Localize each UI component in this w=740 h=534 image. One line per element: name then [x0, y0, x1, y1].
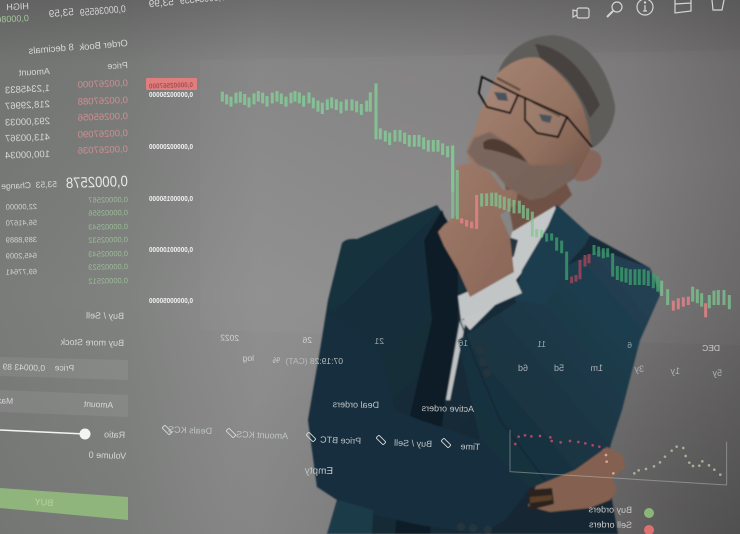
time axis labels: 07:19:28 (CAT) — [285, 356, 343, 366]
orders table — [162, 399, 480, 477]
time axis labels: 11 — [537, 339, 546, 349]
time axis labels: DEC — [702, 343, 720, 353]
time axis labels: 16 — [458, 338, 468, 348]
watch — [528, 488, 554, 510]
order book panel: 0,00036559 — [79, 4, 126, 19]
orders table: Buy / Sell — [394, 438, 432, 449]
tie — [504, 236, 518, 262]
icon: camera — [573, 8, 589, 18]
ratio slider — [0, 428, 90, 440]
order book panel: 1,2345833 — [5, 83, 50, 96]
neck — [505, 170, 572, 240]
candlestick chart — [222, 83, 729, 317]
icon: info — [637, 0, 653, 15]
price tag: 0,00002567000 — [149, 82, 193, 91]
order book panel: 8 decimals — [28, 42, 74, 57]
time axis labels: 1y — [670, 366, 680, 376]
orders table: Price BTC — [319, 435, 361, 446]
order book panel: 0,00002512 — [88, 276, 128, 286]
red bars — [462, 195, 706, 317]
order book panel: 389,8889 — [6, 235, 37, 245]
order book panel: Change — [1, 180, 31, 191]
y-axis labels: 0,00000250000 — [149, 92, 193, 99]
order book panel: Amount — [18, 66, 50, 78]
y-axis labels: 0,00000200000 — [149, 144, 193, 151]
time axis labels: 26 — [302, 335, 312, 345]
order book panel: Price — [107, 60, 128, 71]
time axis labels: 1m — [590, 363, 603, 373]
hair shadow — [535, 44, 600, 118]
time axis labels: 21 — [374, 336, 384, 346]
order book panel: 100,00034 — [5, 149, 50, 162]
hair — [498, 35, 615, 148]
buy and sell form: Buy / Sell — [86, 310, 124, 321]
buy and sell form: Volume 0 — [88, 450, 126, 461]
legend — [588, 504, 654, 534]
icon: magnifier — [607, 2, 622, 17]
face — [467, 57, 592, 200]
jacket body — [308, 205, 660, 534]
order book panel: 293,00033 — [5, 116, 50, 129]
icon: cup — [712, 0, 724, 10]
time axis labels: 5d — [554, 363, 564, 373]
person — [308, 35, 660, 534]
icon: calendar — [675, 0, 691, 13]
buy and sell form — [0, 310, 128, 520]
orders table: Deal orders — [332, 399, 379, 410]
price field — [0, 357, 128, 380]
left forearm — [308, 310, 530, 534]
glasses — [479, 77, 592, 147]
orders table: Active orders — [421, 403, 474, 414]
order book panel: 0,00002543 — [88, 249, 128, 259]
time axis labels — [220, 332, 722, 378]
order book panel: HIGH — [6, 1, 29, 12]
order book panel: 0,00002567 — [88, 195, 128, 205]
order book panel: 413,00367 — [5, 132, 50, 145]
beard — [467, 132, 575, 200]
time axis labels: log — [242, 353, 254, 363]
shirt — [463, 206, 560, 330]
order book panel: 56,41670 — [6, 218, 37, 228]
buy button — [0, 488, 128, 520]
depth chart — [510, 430, 727, 485]
buy and sell form: Ratio — [104, 429, 125, 440]
icons: pencils — [162, 425, 451, 448]
y-axis labels: 0,00000150000 — [149, 196, 193, 203]
arm fold — [460, 320, 545, 480]
orders table: Time — [460, 441, 480, 452]
lower hand — [528, 447, 625, 512]
legend: Sell orders — [588, 519, 632, 530]
moustache — [483, 139, 527, 162]
y-axis labels — [146, 78, 197, 305]
green bars, right section — [453, 146, 729, 309]
order book panel: 69,77641 — [6, 267, 37, 277]
top toolbar icons — [573, 0, 724, 18]
y-axis labels: 0,00000100000 — [149, 247, 193, 254]
order book panel: 0,00265056 — [78, 111, 128, 124]
order book panel: 0,00267090 — [78, 128, 128, 141]
order book panel: 53,59 — [48, 7, 74, 20]
time axis labels: 2022 — [220, 332, 239, 343]
shirt strip — [446, 320, 466, 400]
amount field: Amount — [83, 398, 113, 410]
order book panel: 0,00267036 — [78, 144, 128, 157]
order book panel: 645,2009 — [6, 251, 37, 261]
green dots — [633, 445, 722, 476]
raised hand and forearm — [438, 162, 518, 297]
green bars, left section — [222, 83, 453, 192]
orders table: Amount KCS — [236, 429, 288, 441]
order book panel: 22,00000 — [6, 202, 37, 212]
red dots — [514, 434, 615, 475]
price field: Price — [54, 362, 74, 373]
order book panel: 0,00002543 — [88, 222, 128, 232]
order book panel: Order Book — [79, 38, 128, 53]
lapel — [515, 205, 590, 320]
sleeve buttons — [457, 346, 492, 534]
right sleeve — [458, 250, 660, 488]
legend: Buy orders — [588, 504, 632, 515]
order book panel: 0,00267088 — [78, 95, 128, 108]
amount field — [0, 390, 128, 417]
orders table: Empty — [305, 466, 333, 477]
order book panel: 0,00002523 — [88, 262, 128, 272]
orders table: Deals KCS — [168, 424, 212, 436]
time axis labels: 6 — [627, 340, 632, 350]
buy button: BUY — [34, 497, 54, 508]
price tag — [146, 78, 197, 91]
ear — [575, 150, 601, 181]
eyebrows — [497, 78, 560, 116]
order book panel: 0,00002532 — [88, 235, 128, 245]
dark jacket centre — [395, 210, 458, 534]
time axis labels: 6d — [518, 363, 528, 373]
time axis labels: 5y — [712, 368, 722, 378]
order book panel: 0,00267000 — [78, 78, 128, 91]
cuff — [458, 272, 522, 320]
eyes — [494, 92, 552, 123]
order book panel: 218,29967 — [5, 99, 50, 112]
order book panel — [0, 0, 226, 286]
y-axis labels: 0,00000050000 — [149, 298, 193, 305]
lower jacket — [327, 500, 373, 534]
order book panel: 0,0002578 — [66, 173, 128, 192]
order book panel: 0,00002556 — [88, 208, 128, 218]
time axis labels: 3y — [634, 364, 644, 374]
time axis labels: % — [272, 355, 280, 365]
buy and sell form: Buy more Stock — [60, 337, 124, 348]
order book panel: 53,53 — [35, 179, 57, 190]
price field: 0,00043 89 — [2, 362, 45, 373]
